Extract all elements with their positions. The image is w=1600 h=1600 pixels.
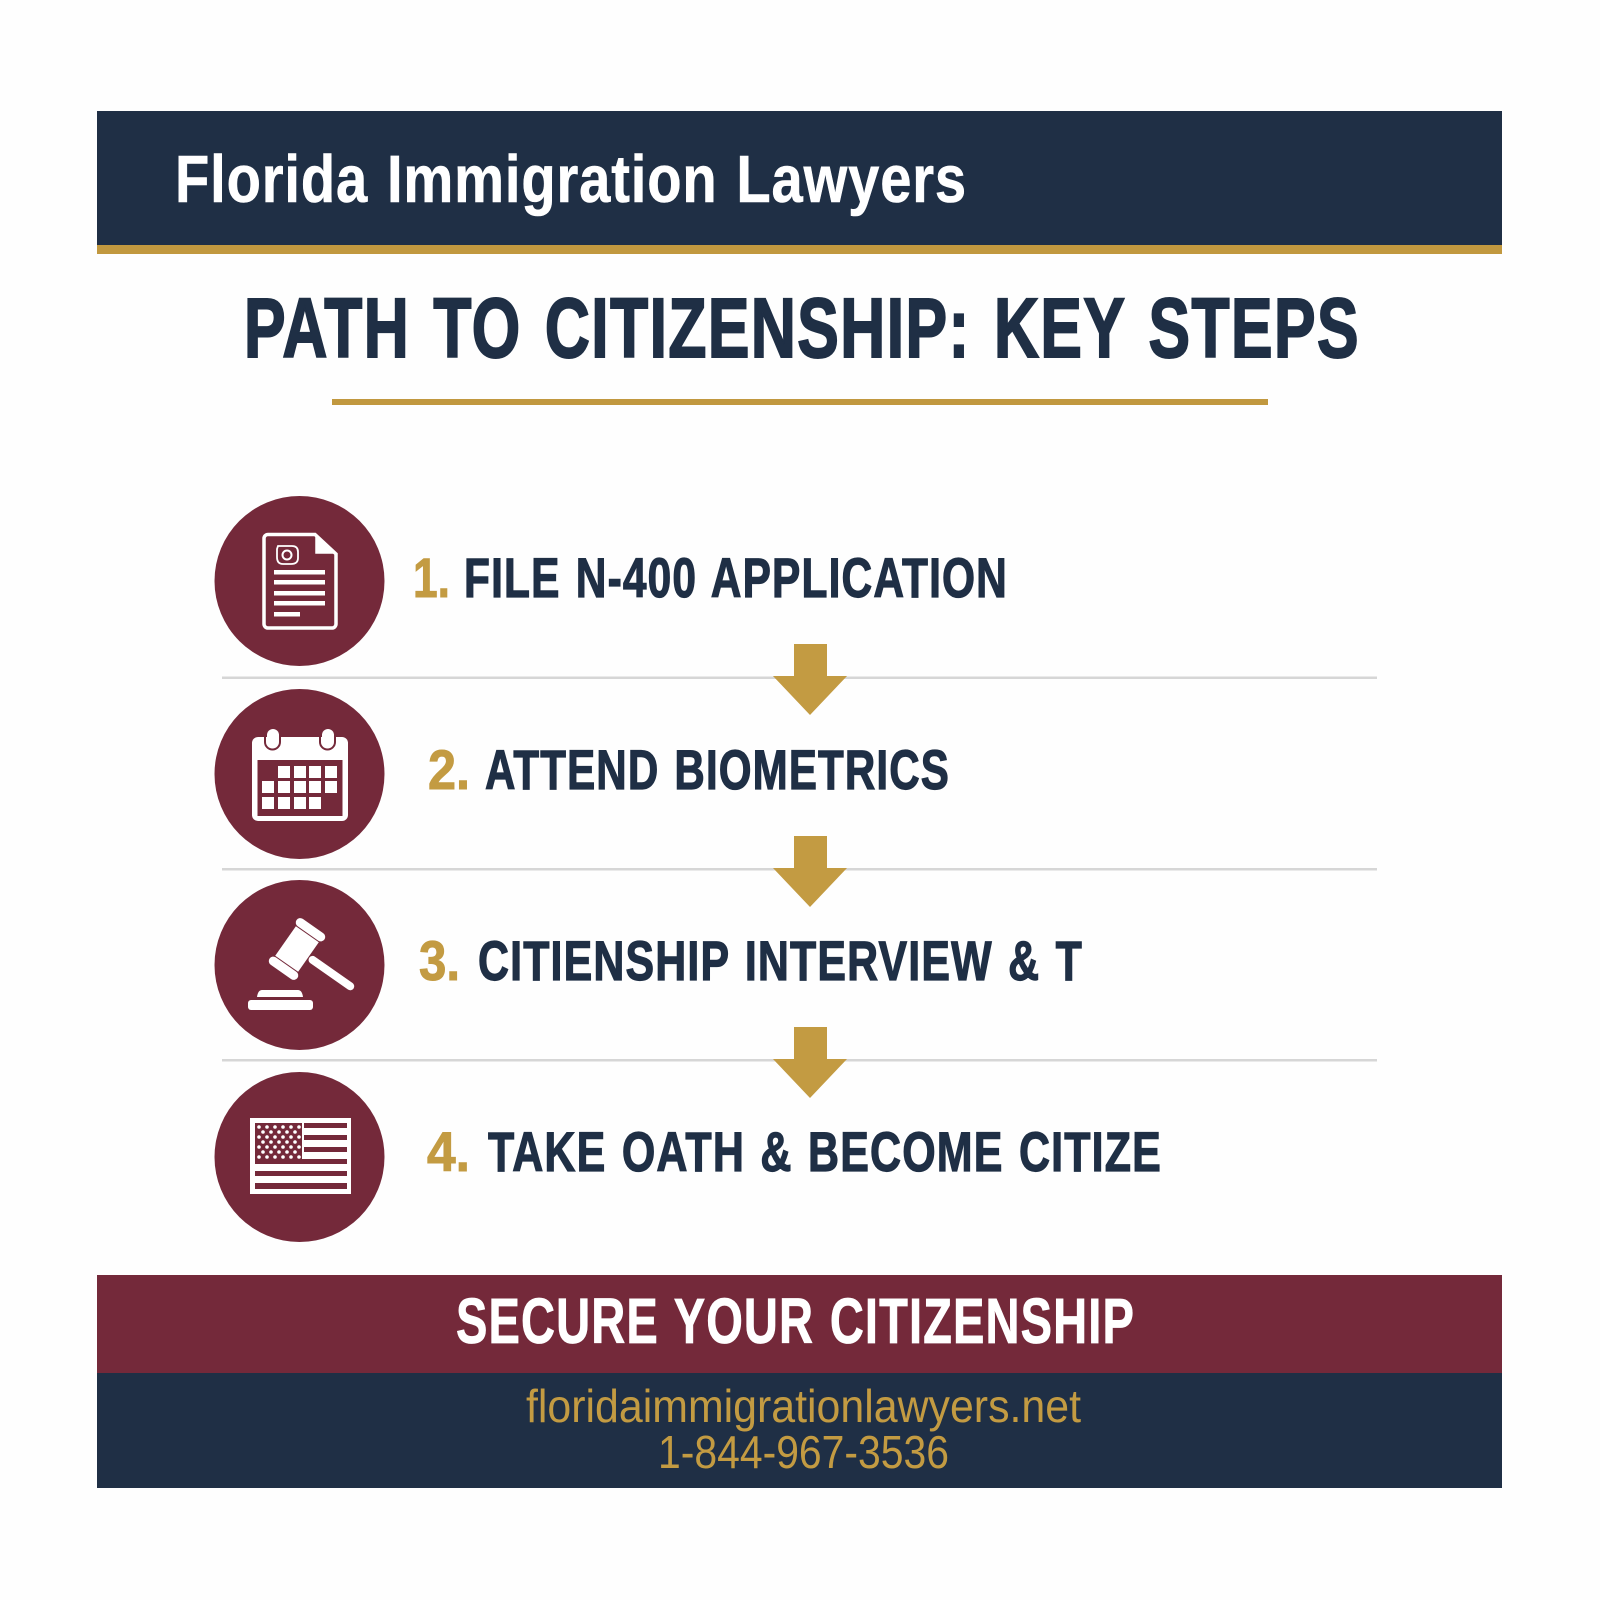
step 4: TAKE OATH & BECOME CITIZE: [488, 1120, 1162, 1183]
arrow 2: [773, 836, 847, 907]
step 2: [214, 689, 950, 859]
header banner: [97, 111, 1502, 254]
icon: flag: [214, 1072, 384, 1242]
phone: 1-844-967-3536: [658, 1426, 949, 1478]
step 2: ATTEND BIOMETRICS: [485, 738, 950, 801]
arrow 1: [773, 644, 847, 715]
contact footer: [97, 1373, 1502, 1488]
call to action banner: [97, 1275, 1502, 1373]
step 3 label: 3.: [419, 929, 460, 992]
divider lines: [222, 676, 1377, 1062]
step 3: [214, 880, 1083, 1050]
step 4 label: 4.: [427, 1120, 470, 1183]
icon: calendar: [214, 689, 384, 859]
step 1: [214, 496, 1008, 666]
website: floridaimmigrationlawyers.net: [526, 1380, 1081, 1432]
call to action banner: SECURE YOUR CITIZENSHIP: [456, 1285, 1135, 1357]
arrow 3: [773, 1027, 847, 1098]
step 4: [214, 1072, 1162, 1242]
step 3: CITIENSHIP INTERVIEW & T: [478, 929, 1083, 992]
step 1 label: 1.: [413, 546, 450, 609]
icon: gavel: [214, 880, 384, 1050]
main title: [244, 281, 1360, 405]
icon: document: [214, 496, 384, 666]
step 1: FILE N-400 APPLICATION: [464, 546, 1008, 609]
firm name: Florida Immigration Lawyers: [175, 142, 967, 217]
step 2 label: 2.: [428, 738, 470, 801]
